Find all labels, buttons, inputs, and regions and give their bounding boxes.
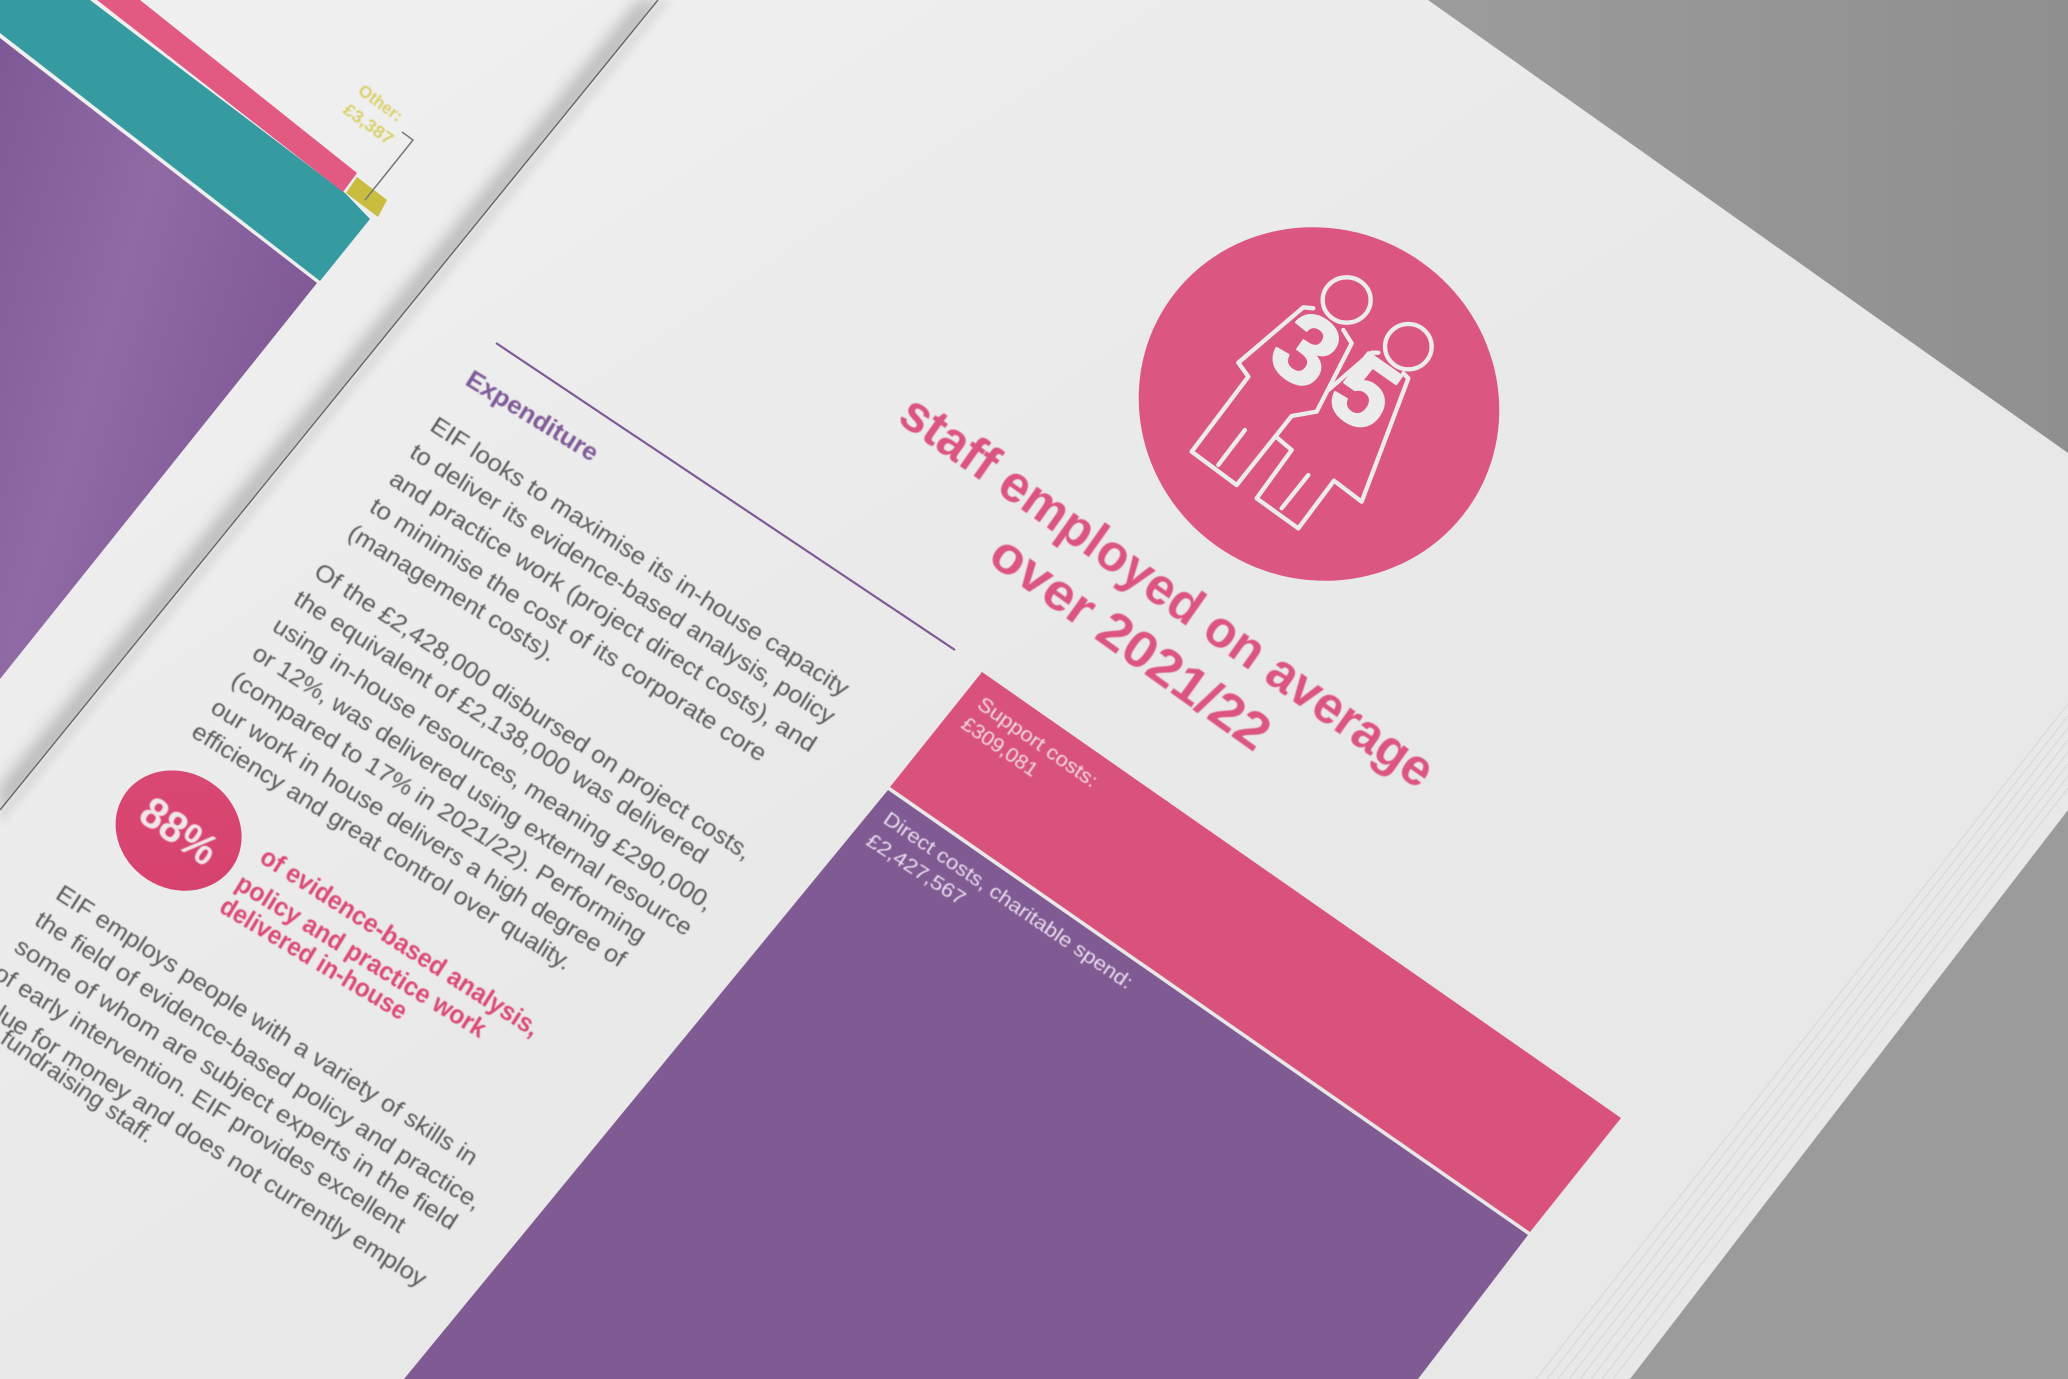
- headline: staff employed: staff employed on average: [889, 383, 1445, 800]
- text block: project costs: (compared to 17% in 2021/22). Performing: [226, 666, 651, 949]
- grey surface top right: [1428, 0, 2068, 453]
- stacked page edges: [1536, 704, 2068, 1379]
- text block: project costs: using in-house resources, meaning £290,000,: [268, 612, 718, 917]
- icon: two people with number 35: 5: [1310, 330, 1420, 454]
- text block: in-house capacity: to minimise the cost of its corporate core: [365, 493, 771, 767]
- text block: staff skills: of early intervention. EIF provides excellent: [0, 960, 411, 1239]
- chart: pink support costs block: [890, 672, 1621, 1232]
- other label: [340, 81, 406, 149]
- text block: in-house capacity: [343, 412, 854, 767]
- callout text: policy and practice work: [231, 868, 493, 1044]
- callout: 88 percent badge: 88%: [131, 787, 228, 875]
- headline: staff employed: over 2021/22: [979, 524, 1281, 762]
- label: support costs: Support costs:: [973, 693, 1102, 792]
- other label: £3,387: [340, 100, 397, 149]
- other callout leader: [365, 132, 413, 200]
- text block: project costs: our work in house delivers a high degree of: [206, 694, 631, 973]
- label: direct costs: Direct costs, charitable spend:: [879, 808, 1137, 994]
- text block: project costs: [187, 558, 757, 976]
- chart: purple direct costs block: [404, 790, 1528, 1379]
- text block: staff skills: fundraising staff.: [0, 1025, 159, 1149]
- left page bar chart: [0, 0, 387, 679]
- icon: two people with number 35: [1192, 277, 1432, 528]
- text block: in-house capacity: and practice work (project direct costs), and: [385, 465, 821, 758]
- text block: project costs: or 12%, was delivered using external resource: [247, 639, 697, 941]
- gutter shadow and spine: [0, 0, 672, 826]
- other label: Other:: [355, 81, 406, 126]
- text block: project costs: the equivalent of £2,138,000 was delivered: [289, 585, 713, 870]
- callout text: delivered in-house: [215, 890, 413, 1026]
- pink segment: [97, 0, 357, 192]
- text block: project costs: efficiency and great control over quality.: [187, 718, 576, 976]
- heading rule: [496, 343, 955, 650]
- text block: staff skills: [0, 880, 487, 1293]
- heading: expenditure: Expenditure: [461, 365, 603, 468]
- yellow other segment: [346, 177, 387, 217]
- label: support costs: £309,081: [957, 713, 1042, 782]
- callout: 88 percent badge: [92, 747, 265, 915]
- text block: staff skills: the field of evidence-based policy and practice,: [30, 906, 487, 1216]
- teal segment: [0, 0, 370, 281]
- callout text: of evidence-based analysis,: [255, 841, 546, 1042]
- text block: staff skills: EIF employs people with a variety of skills in: [51, 880, 482, 1171]
- icon: two people with number 35: 3: [1251, 288, 1361, 412]
- big pink circle icon: 35 staff: [1074, 161, 1564, 647]
- text block: in-house capacity: to deliver its evidence-based analysis, policy: [405, 439, 840, 730]
- purple segment: [0, 38, 317, 679]
- label: direct costs: £2,427,567: [862, 830, 969, 910]
- text block: in-house capacity: (management costs).: [343, 519, 561, 668]
- text block: project costs: Of the £2,428,000 disbursed on project costs,: [309, 558, 757, 866]
- text block: in-house capacity: EIF looks to maximise its in-house capacity: [425, 412, 854, 702]
- text block: staff skills: some of whom are subject experts in the field: [10, 933, 462, 1236]
